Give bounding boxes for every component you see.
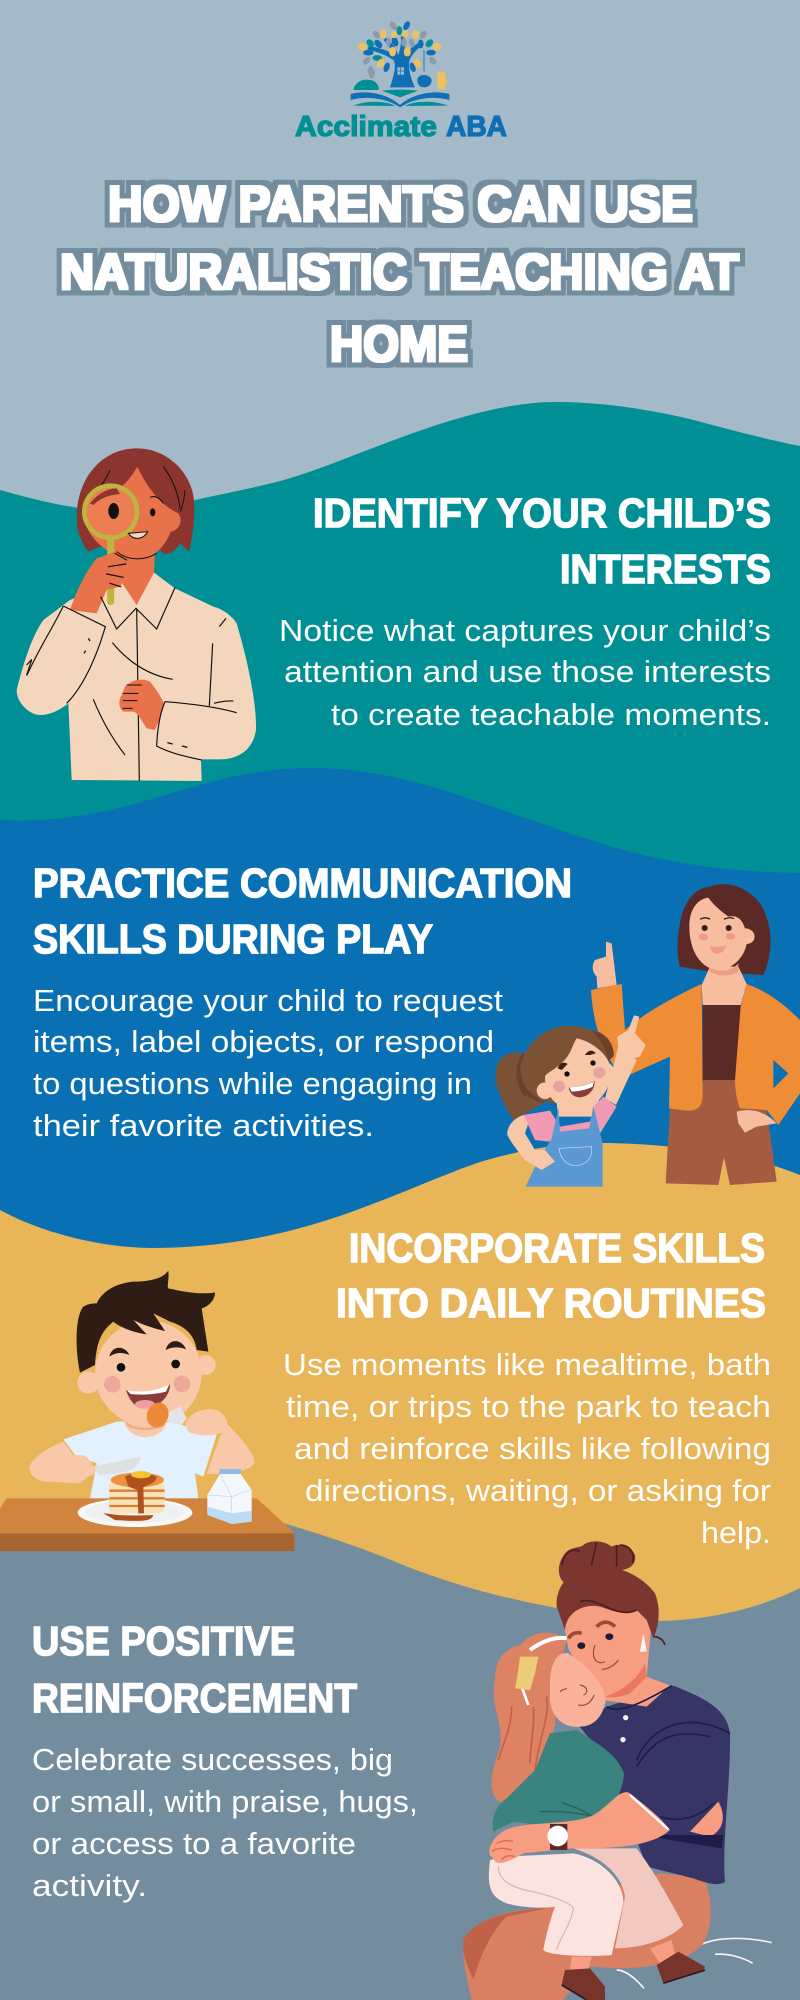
wordmark: Acclimate	[295, 111, 437, 143]
body text: to create teachable moments.	[331, 697, 771, 732]
body text: Notice what captures your child’s	[279, 613, 771, 648]
body text: Encourage your child to request	[33, 983, 503, 1018]
plate of pancakes	[78, 1471, 192, 1527]
heading	[313, 490, 771, 592]
title: NATURALISTIC TEACHING AT	[60, 244, 739, 300]
wave: yellow band	[0, 1143, 800, 2000]
boy	[29, 1271, 254, 1498]
wave: blue band	[0, 768, 800, 2000]
mother	[463, 1541, 730, 2000]
milk carton	[207, 1469, 252, 1524]
body text: Celebrate successes, big	[32, 1742, 393, 1777]
illustration: mother and daughter pointing up	[496, 884, 800, 1187]
icon: tree over open book	[351, 21, 449, 107]
illustration: woman with magnifying glass	[17, 448, 256, 781]
body text: time, or trips to the park to teach	[286, 1389, 771, 1424]
body text: or small, with praise, hugs,	[32, 1784, 418, 1819]
body text	[33, 983, 503, 1143]
body text: or access to a favorite	[32, 1826, 356, 1861]
mother	[591, 884, 800, 1185]
heading	[32, 1618, 357, 1721]
heading: PRACTICE COMMUNICATION	[33, 860, 572, 906]
heading: INTO DAILY ROUTINES	[336, 1280, 766, 1326]
illustration: mother hugging daughter	[463, 1541, 772, 2000]
logo: Acclimate ABA	[295, 21, 507, 143]
body text: Use moments like mealtime, bath	[283, 1347, 771, 1382]
daughter	[496, 1015, 646, 1187]
heading: IDENTIFY YOUR CHILD’S	[313, 490, 771, 536]
motion lines	[617, 1938, 772, 1988]
body text: their favorite activities.	[33, 1108, 374, 1143]
wordmark	[295, 111, 507, 143]
wave: slate band	[0, 1513, 800, 2000]
heading: INTERESTS	[560, 546, 771, 592]
title: HOME	[330, 316, 468, 372]
body text: directions, waiting, or asking for	[305, 1473, 771, 1508]
title: HOW PARENTS CAN USE	[108, 176, 693, 232]
body text	[283, 1347, 771, 1550]
body text: items, label objects, or respond	[33, 1024, 494, 1059]
body text	[32, 1742, 418, 1903]
body text: attention and use those interests	[284, 654, 771, 689]
heading	[33, 860, 572, 962]
heading: SKILLS DURING PLAY	[33, 916, 433, 962]
wordmark: ABA	[446, 111, 507, 143]
panel: practice communication skills during play	[33, 860, 800, 1187]
body text: and reinforce skills like following	[294, 1431, 771, 1466]
heading: REINFORCEMENT	[32, 1675, 357, 1721]
panel: identify your child's interests	[17, 448, 771, 781]
panel: use positive reinforcement	[32, 1541, 772, 2000]
body text: help.	[701, 1515, 771, 1550]
body text	[279, 613, 771, 732]
panel: incorporate skills into daily routines	[0, 1225, 771, 1551]
heading	[336, 1225, 766, 1326]
mother's arm and girl's watch	[489, 1792, 670, 1863]
illustration: boy eating pancakes	[0, 1271, 295, 1551]
daughter	[489, 1633, 705, 2000]
body text: to questions while engaging in	[33, 1066, 472, 1101]
heading: USE POSITIVE	[32, 1618, 295, 1664]
heading: INCORPORATE SKILLS	[349, 1225, 765, 1271]
table	[0, 1498, 295, 1551]
body text: activity.	[32, 1868, 147, 1903]
title	[60, 176, 739, 372]
wave: teal band	[0, 402, 800, 2000]
